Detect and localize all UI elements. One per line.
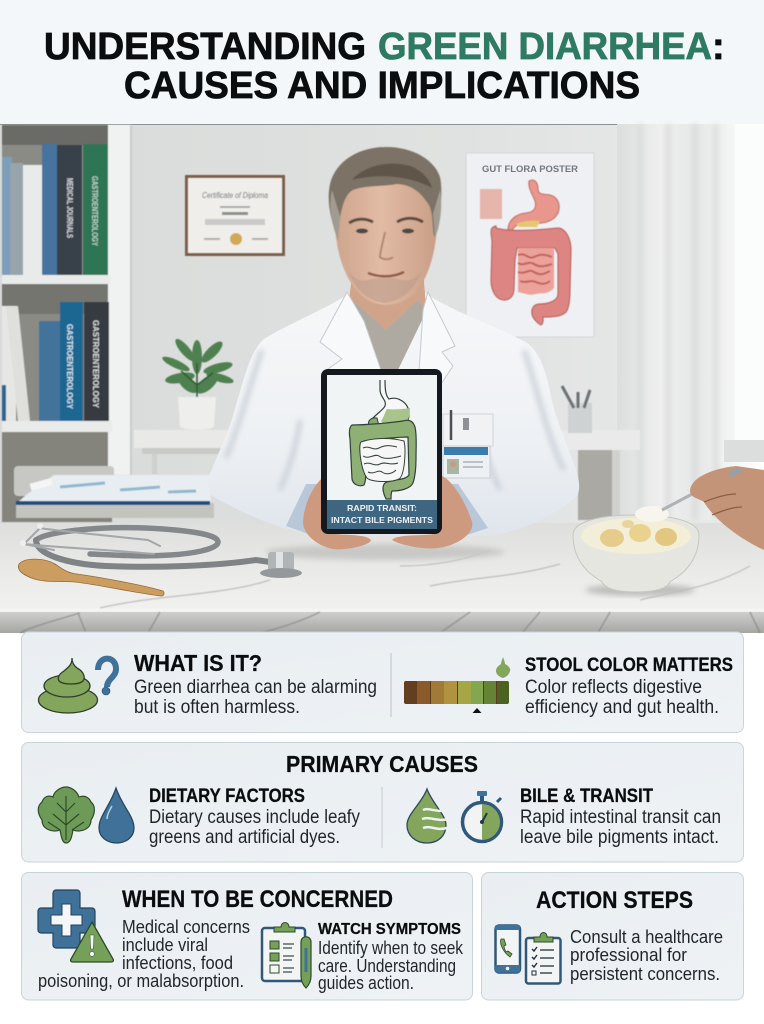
clipboard and book stack (16, 475, 214, 518)
window and curtains (617, 124, 764, 520)
hair (329, 147, 441, 240)
text: stool color: efficiency and gut health. (525, 697, 719, 718)
text: dietary factors: Dietary causes include leafy (149, 807, 360, 828)
left side table with plant (134, 336, 235, 474)
diploma frame (185, 175, 285, 256)
hand with spoon (690, 466, 764, 550)
text: medical concerns: include viral (122, 935, 208, 955)
pocket and ID badge (443, 414, 493, 446)
text: medical concerns (38, 917, 250, 991)
heading: primary causes: PRIMARY CAUSES (286, 751, 478, 777)
icon: phone (495, 925, 520, 972)
panel: action steps (482, 872, 744, 1000)
panel: when to be concerned (22, 872, 472, 1000)
text: stool color: Color reflects digestive (525, 677, 702, 698)
gut flora poster (466, 153, 594, 337)
wooden spoon (18, 559, 164, 596)
bookshelf: GASTROENTEROLOGY (90, 176, 99, 247)
text: action steps: professional for (570, 945, 687, 965)
lab coat (208, 293, 579, 536)
title banner: UNDERSTANDING (44, 26, 366, 68)
text: dietary factors: greens and artificial dyes. (149, 827, 340, 848)
text: watch symptoms: Identify when to seek (318, 938, 464, 958)
head (329, 147, 441, 305)
text: stool color (525, 677, 719, 718)
doctor (208, 147, 579, 549)
tablet: RAPID TRANSIT: (347, 503, 417, 513)
text: action steps (570, 927, 723, 984)
text: action steps: persistent concerns. (570, 964, 720, 984)
stethoscope (20, 523, 302, 578)
heading: dietary factors: DIETARY FACTORS (149, 786, 305, 807)
heading: stool color matters: STOOL COLOR MATTERS (525, 655, 733, 676)
text: medical concerns: poisoning, or malabsorption. (38, 971, 244, 991)
marble table (0, 523, 764, 633)
text: bile and transit: leave bile pigments intact. (520, 827, 719, 848)
neck and shirt (348, 270, 426, 352)
bookshelf: GASTROENTEROLOGY (65, 324, 75, 409)
icon: leafy greens (38, 787, 94, 843)
text: what is it: but is often harmless. (134, 697, 300, 718)
bookshelf: MEDICAL JOURNALS (65, 178, 74, 238)
face features (349, 218, 423, 223)
icon: green stool with question mark (38, 658, 116, 713)
sleeve cuffs (286, 484, 488, 536)
title banner: CAUSES AND IMPLICATIONS (124, 65, 640, 107)
icon: checklist clipboard (526, 932, 560, 984)
diploma frame: Certificate of Diploma (202, 191, 268, 200)
panel: what is it / stool color (22, 632, 744, 732)
bookshelf (2, 125, 132, 522)
text: action steps: Consult a healthcare (570, 927, 723, 947)
bookshelf: GASTROENTEROLOGY (91, 320, 101, 408)
heading: what is it: WHAT IS IT? (134, 650, 262, 676)
icon: symptom clipboard with thermometer (262, 922, 311, 988)
title banner (0, 0, 764, 124)
tablet anatomy illustration (349, 380, 416, 499)
heading: bile and transit: BILE & TRANSIT (520, 786, 653, 807)
photo: doctor in clinic (0, 124, 764, 633)
icon: stool color scale (404, 657, 510, 713)
text: medical concerns: infections, food (122, 953, 233, 973)
text: watch symptoms: care. Understanding (318, 956, 456, 976)
text: what is it: Green diarrhea can be alarming (134, 677, 377, 698)
heading: watch symptoms: WATCH SYMPTOMS (318, 921, 461, 938)
hands (303, 478, 371, 549)
text: watch symptoms (318, 938, 464, 993)
yogurt bowl with banana (573, 472, 734, 596)
title banner: GREEN DIARRHEA (378, 26, 712, 68)
heading: when to be concerned: WHEN TO BE CONCERNED (122, 886, 393, 913)
icon: water drop (99, 788, 134, 843)
icon: medical cross with warning (38, 890, 113, 962)
tablet (321, 369, 442, 534)
panel: primary causes (22, 742, 744, 862)
text: dietary factors (149, 807, 360, 848)
text: what is it (134, 677, 377, 718)
heading: action steps: ACTION STEPS (536, 887, 693, 914)
text: medical concerns: Medical concerns (122, 917, 250, 937)
icon: stopwatch (462, 791, 502, 842)
title banner: : (712, 26, 725, 68)
tablet: INTACT BILE PIGMENTS (331, 515, 433, 525)
gut flora poster: GUT FLORA POSTER (482, 164, 578, 175)
text: watch symptoms: guides action. (318, 973, 414, 993)
icon: bile drop (407, 789, 450, 843)
right side table with pen cup (560, 386, 640, 520)
text: bile and transit (520, 807, 721, 848)
text: bile and transit: Rapid intestinal transit can (520, 807, 721, 828)
